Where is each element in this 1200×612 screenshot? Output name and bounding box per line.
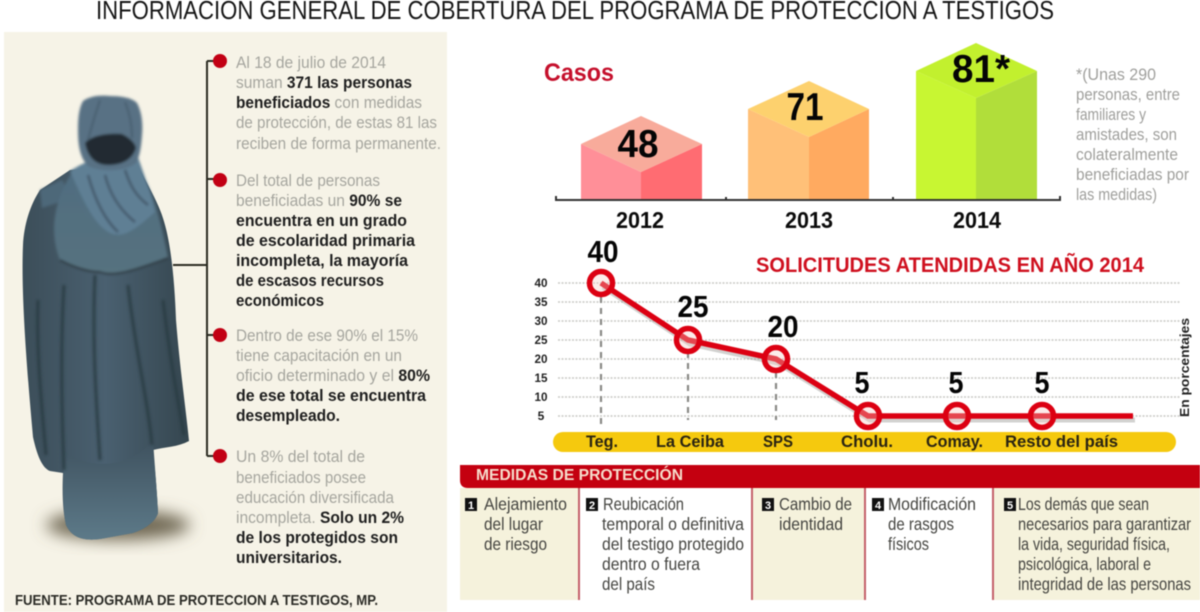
- measure 2: dentro o fuera: [602, 554, 700, 574]
- measure 4: 4: [875, 500, 882, 512]
- footnote: *(Unas 290: [1076, 66, 1156, 84]
- footnote: las medidas): [1076, 186, 1157, 204]
- category band: Comay.: [926, 432, 983, 451]
- text block 1: reciben de forma permanente.: [236, 134, 441, 153]
- header bar: MEDIDAS DE PROTECCIÓN: [476, 465, 683, 484]
- y axis labels: 40: [534, 276, 548, 290]
- source note: FUENTE: PROGRAMA DE PROTECCION A TESTIGOS, MP.: [15, 592, 378, 609]
- text block 1: suman 371 las personas: [236, 73, 412, 92]
- value labels: 5: [948, 365, 964, 400]
- text block 3: tiene capacitación en un: [236, 346, 402, 365]
- y axis labels: 35: [534, 295, 548, 309]
- connector lines: [173, 61, 220, 456]
- measure 2: 2: [589, 500, 595, 512]
- measure 1: [465, 494, 567, 554]
- measure 4: físicos: [888, 534, 929, 554]
- measure 1: 1: [468, 500, 474, 512]
- category band: [553, 432, 1176, 452]
- year labels: [616, 207, 1001, 233]
- panel: beneficiaries: [4, 32, 447, 612]
- category band: Cholu.: [841, 432, 893, 451]
- measure 5: psicológica, laboral e: [1018, 554, 1151, 574]
- cell backgrounds: [460, 488, 1200, 600]
- text block 1: beneficiados con medidas: [236, 93, 422, 112]
- value labels: 5: [854, 365, 870, 400]
- category band: SPS: [763, 432, 793, 451]
- text block 4: [236, 447, 404, 567]
- year labels: 2013: [785, 207, 833, 233]
- heading: casos: Casos: [544, 59, 614, 87]
- measure 3: identidad: [779, 514, 843, 534]
- text block 1: de protección, de estas 81 las: [236, 113, 437, 132]
- category band: Teg.: [586, 432, 618, 451]
- y axis labels: 10: [534, 390, 548, 404]
- text block 2: [236, 171, 415, 310]
- value labels: 40: [588, 234, 618, 269]
- measure 3: Cambio de: [779, 494, 852, 514]
- measure 2: Reubicación: [603, 494, 684, 514]
- y axis labels: 30: [534, 314, 548, 328]
- y axis labels: 25: [534, 333, 548, 347]
- text block 3: [236, 326, 430, 425]
- panel: medidas de protección: [460, 465, 1200, 600]
- measure 4: de rasgos: [888, 514, 954, 534]
- bar 2014: 81*: [952, 48, 1011, 91]
- bar 2012: 48: [618, 123, 658, 166]
- measure 4: Modificación: [888, 494, 976, 514]
- footnote: beneficiadas por: [1076, 166, 1189, 184]
- measure 5: 5: [1007, 500, 1013, 512]
- y axis labels: 15: [534, 371, 548, 385]
- bar chart: casos: [544, 43, 1060, 233]
- value labels: 20: [768, 309, 798, 344]
- measure 5: [1004, 494, 1191, 594]
- text block 4: educación diversificada: [236, 488, 394, 507]
- measure 2: del testigo protegido: [602, 534, 744, 554]
- measure 4: [872, 494, 976, 554]
- footnote: familiares y: [1076, 106, 1147, 124]
- text block 2: económicos: [236, 291, 324, 310]
- text block 3: de ese total se encuentra: [236, 386, 427, 405]
- text block 2: incompleta, la mayoría: [236, 251, 409, 270]
- text block 4: beneficiados posee: [236, 468, 366, 487]
- text block 1: [236, 53, 441, 153]
- text block 4: incompleta. Solo un 2%: [236, 508, 404, 527]
- icon: hooded figure: [23, 96, 190, 540]
- text block 2: de escasos recursos: [236, 271, 384, 290]
- value labels: 5: [1034, 365, 1050, 400]
- bar 2013: 71: [786, 86, 824, 129]
- data line: [590, 272, 1135, 428]
- value labels: 25: [678, 289, 708, 324]
- text block 2: de escolaridad primaria: [236, 231, 415, 250]
- bar 2014: [916, 43, 1037, 199]
- footnote: [1076, 66, 1189, 204]
- text block 4: Un 8% del total de: [236, 447, 365, 466]
- text block 1: Al 18 de julio de 2014: [236, 53, 386, 72]
- axis unit: En porcentajes: [1177, 318, 1192, 417]
- bar 2013: [748, 81, 869, 199]
- measure 1: Alejamiento: [484, 494, 567, 514]
- text block 4: universitarios.: [236, 548, 342, 567]
- measure 1: del lugar: [484, 514, 543, 534]
- year labels: 2012: [616, 207, 664, 233]
- measure 1: de riesgo: [484, 534, 547, 554]
- measure 3: 3: [765, 500, 771, 512]
- measure 2: [586, 494, 744, 594]
- bullet dots: [213, 54, 227, 463]
- category band: La Ceiba: [656, 432, 725, 451]
- text block 2: beneficiadas un 90% se: [236, 191, 402, 210]
- text block 4: de los protegidos son: [236, 528, 398, 547]
- text block 2: Del total de personas: [236, 171, 380, 190]
- value labels: [588, 234, 1050, 400]
- heading: solicitudes: SOLICITUDES ATENDIDAS EN AÑO 2014: [756, 254, 1144, 277]
- footnote: personas, entre: [1076, 86, 1180, 104]
- text block 2: encuentra en un grado: [236, 211, 407, 230]
- line chart: solicitudes: [534, 234, 1192, 452]
- category band: Resto del país: [1005, 432, 1118, 451]
- text block 3: Dentro de ese 90% el 15%: [236, 326, 418, 345]
- footnote: colateralmente: [1076, 146, 1178, 164]
- measure 2: temporal o definitiva: [602, 514, 744, 534]
- y axis labels: 20: [534, 352, 548, 366]
- y axis labels: 5: [538, 409, 545, 423]
- bar 2012: [581, 116, 702, 199]
- text block 3: desempleado.: [236, 406, 340, 425]
- text block 3: oficio determinado y el 80%: [236, 366, 430, 385]
- y axis labels: [534, 276, 548, 423]
- measure 5: Los demás que sean: [1018, 494, 1149, 514]
- header bar: [460, 465, 1200, 488]
- footnote: amistades, son: [1076, 126, 1177, 144]
- measure 3: [762, 494, 852, 534]
- year labels: 2014: [953, 207, 1001, 233]
- measure 2: del país: [602, 574, 655, 594]
